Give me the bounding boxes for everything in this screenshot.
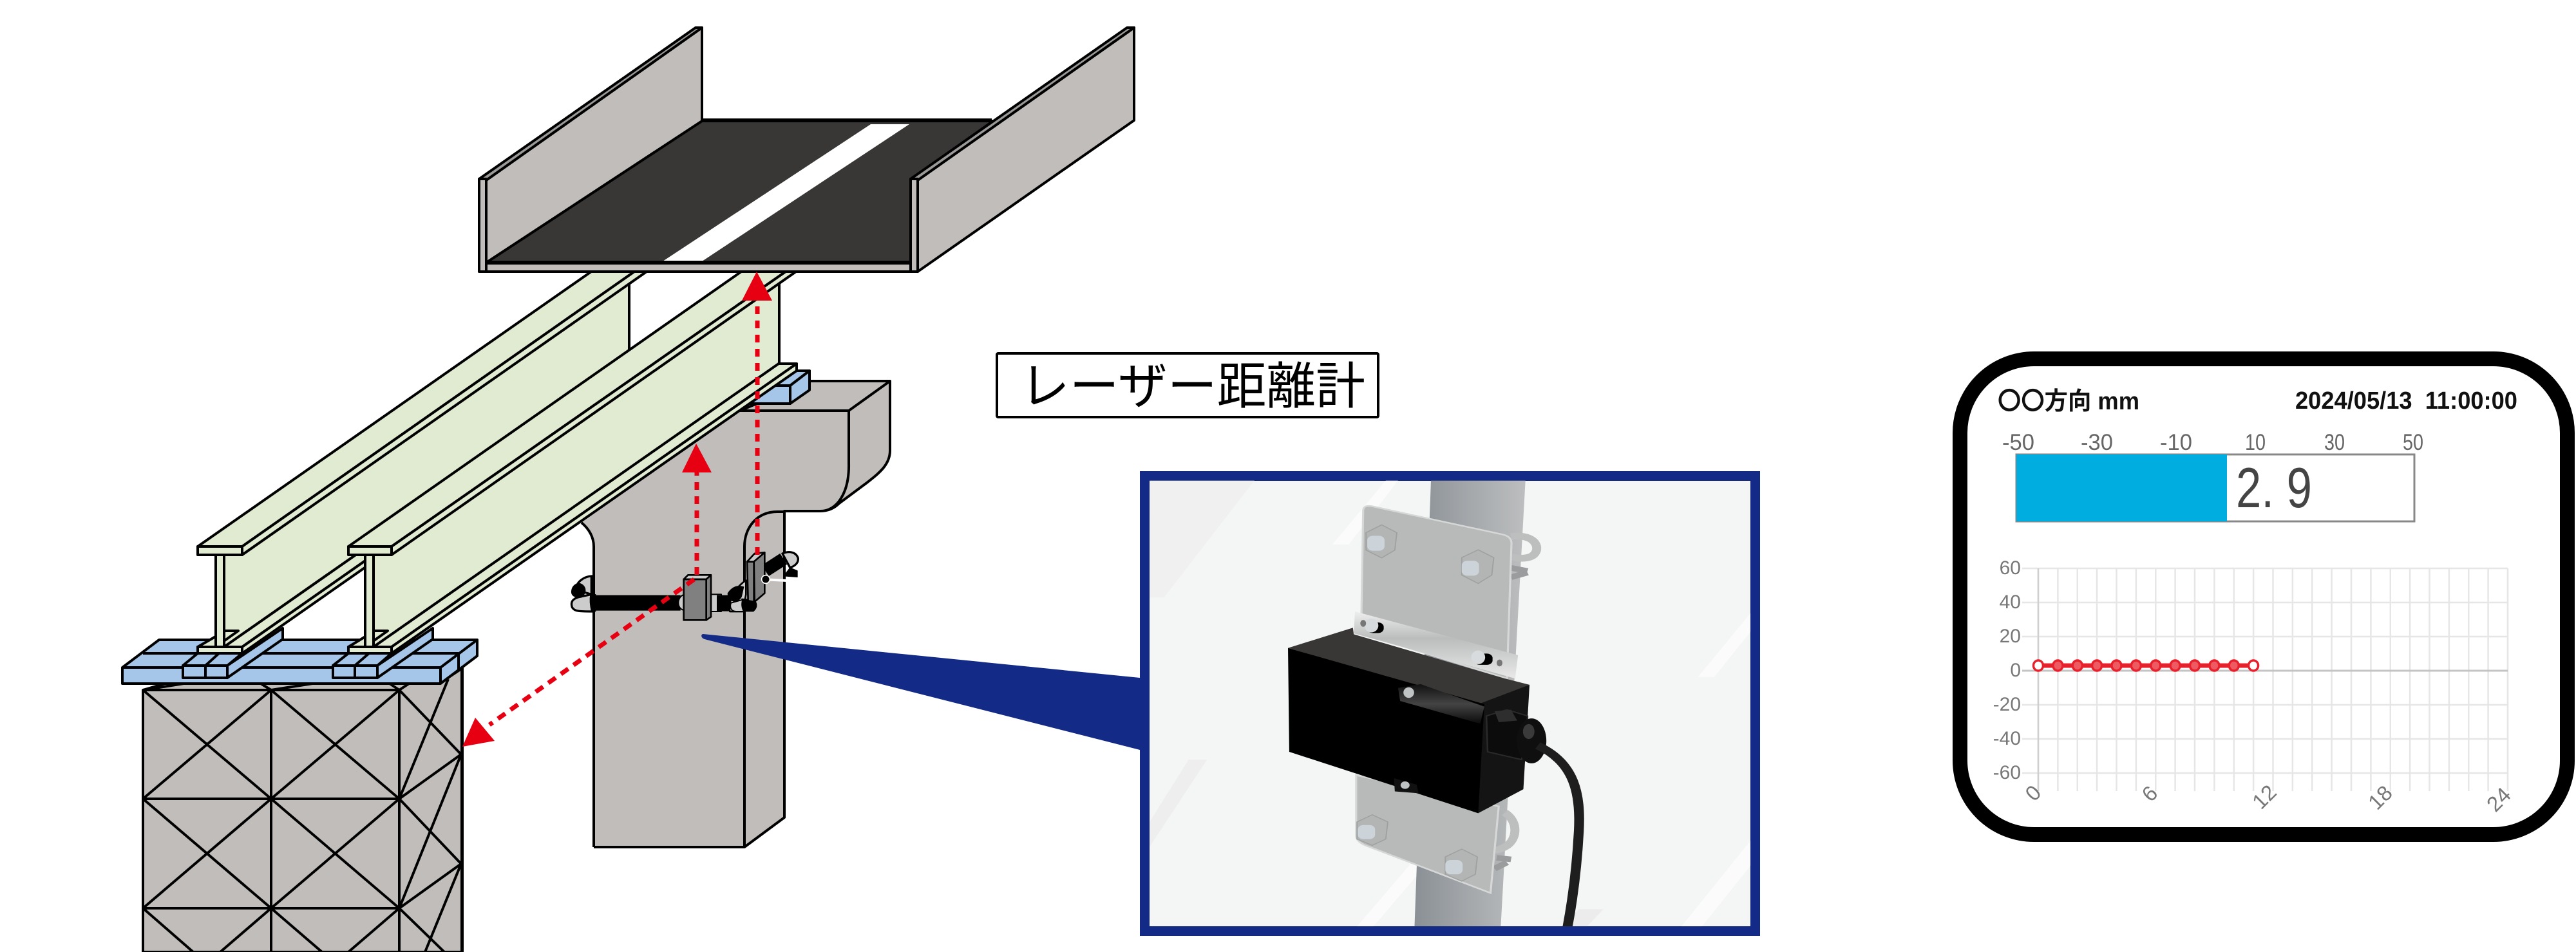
deck edge — [486, 120, 992, 272]
lane stripe — [663, 124, 909, 261]
timestamp: 2024/05/13 11:00:00 — [2295, 387, 2517, 415]
bearing block 2 — [333, 628, 433, 678]
y axis labels: 40 — [2000, 592, 2021, 613]
x axis labels: 18 — [2363, 781, 2397, 814]
data series — [2034, 660, 2259, 671]
x axis labels: 6 — [2137, 781, 2162, 806]
panel title: 〇〇方向 mm — [1998, 388, 2139, 415]
sensor front — [684, 575, 711, 620]
y axis labels: -20 — [1993, 694, 2021, 715]
gauge scale labels: -30 — [2081, 430, 2113, 455]
x axis labels: 24 — [2482, 783, 2515, 816]
line chart — [1993, 557, 2515, 816]
pole — [1414, 481, 1526, 926]
gauge scale labels — [2002, 430, 2423, 455]
gauge bar — [2016, 454, 2414, 521]
bearing block 1 — [183, 628, 283, 678]
abutment pier with lattice — [143, 668, 462, 952]
gauge scale labels: 50 — [2403, 430, 2423, 455]
gauge scale labels: 10 — [2245, 430, 2266, 455]
gauge scale labels: -10 — [2160, 430, 2192, 455]
bridge illustration — [122, 28, 1134, 952]
y axis labels: 60 — [2000, 557, 2021, 579]
U-bolt upper — [1511, 536, 1537, 577]
steel girder 1 — [198, 272, 647, 653]
cable gland — [1486, 710, 1528, 760]
callout pointer — [701, 634, 1140, 750]
middle couplers — [678, 581, 757, 611]
lower plate — [1356, 775, 1499, 893]
gauge scale labels: -50 — [2002, 430, 2034, 455]
photo background — [1150, 481, 1750, 926]
sensor box — [1288, 628, 1546, 813]
laser beams — [462, 272, 772, 747]
beam to abutment — [462, 579, 694, 747]
sensor side — [747, 552, 770, 602]
sensor photo panel — [1145, 476, 1756, 931]
y axis labels — [1993, 557, 2021, 783]
beam to girder — [682, 443, 712, 575]
right pipe — [765, 552, 798, 581]
right wall — [911, 28, 1134, 272]
gauge scale labels: 30 — [2324, 430, 2345, 455]
pipe — [591, 580, 681, 626]
label: laser rangefinder: レーザー距離計 — [1020, 358, 1365, 415]
left elbow — [571, 576, 596, 611]
blue bearing plate — [122, 628, 477, 684]
beam to deck — [742, 272, 772, 555]
road surface — [486, 121, 993, 263]
cable — [1538, 745, 1579, 928]
y axis labels: 0 — [2010, 660, 2021, 681]
concrete pier with cap — [582, 381, 890, 847]
y axis labels: -40 — [1993, 728, 2021, 749]
y axis labels: 20 — [2000, 626, 2021, 647]
bridge deck — [479, 28, 1134, 272]
y axis labels: -60 — [1993, 762, 2021, 783]
x axis labels: 0 — [2020, 780, 2045, 805]
chart grid — [2022, 568, 2508, 791]
bolts — [1357, 525, 1494, 881]
mounting strip — [1354, 611, 1518, 678]
U-bolt lower — [1493, 812, 1515, 869]
laser sensors on pier — [571, 552, 798, 620]
left wall — [479, 28, 702, 272]
x axis labels — [2020, 780, 2515, 816]
bearing on pier cap — [747, 371, 810, 404]
box bracket — [1398, 684, 1484, 723]
gauge bar: 2. 9 — [2236, 456, 2312, 519]
photo of sensor on pole — [1150, 481, 1750, 928]
x axis labels: 12 — [2248, 780, 2281, 814]
steel girder 2 — [348, 272, 797, 653]
monitor panel — [1960, 359, 2567, 834]
upper plate — [1361, 506, 1511, 678]
